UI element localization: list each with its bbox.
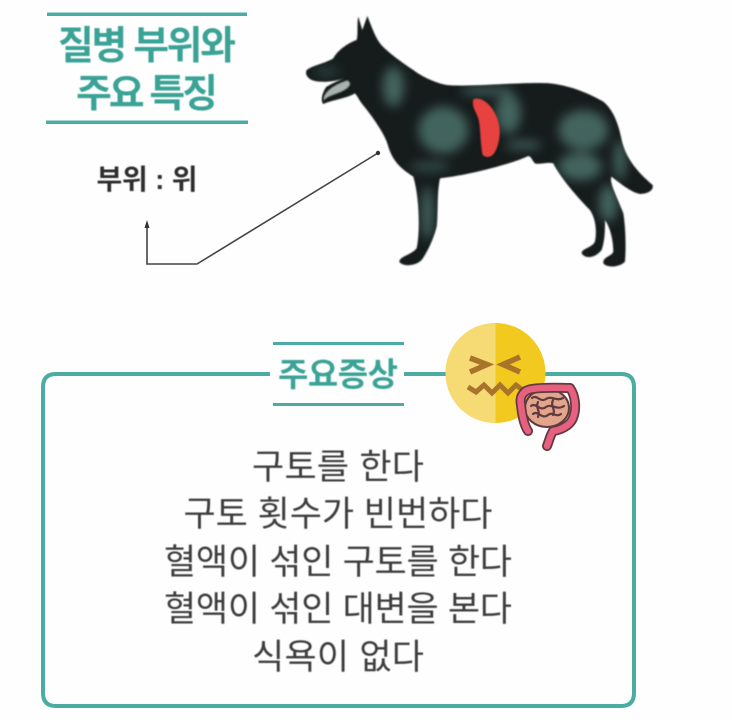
title block: 주요 특징 (76, 73, 218, 116)
title block (46, 12, 248, 124)
symptom list: 혈액이 섞인 대변을 본다 (164, 590, 512, 629)
title text: 질병 부위와 (58, 25, 236, 68)
symptom list: 구토 횟수가 빈번하다 (184, 495, 492, 534)
symptom list: 혈액이 섞인 구토를 한다 (164, 543, 512, 582)
symptom list: 식욕이 없다 (252, 638, 424, 677)
icon: intestines (521, 388, 575, 446)
symptom list: 구토를 한다 (252, 448, 424, 487)
icon: sick face emoji (446, 323, 546, 423)
stomach highlight (473, 99, 500, 157)
arrow: pointer from dog to label (144, 151, 380, 264)
symptom list (164, 448, 512, 677)
heading: main symptoms: 주요증상 (278, 356, 398, 393)
panel: main symptoms (43, 342, 634, 706)
label: affected area: 부위 : 위 (96, 164, 198, 195)
heading: main symptoms (273, 342, 404, 406)
tongue (323, 80, 350, 102)
illustration: dog with stomach highlighted (306, 16, 653, 267)
fur highlights (313, 67, 626, 240)
